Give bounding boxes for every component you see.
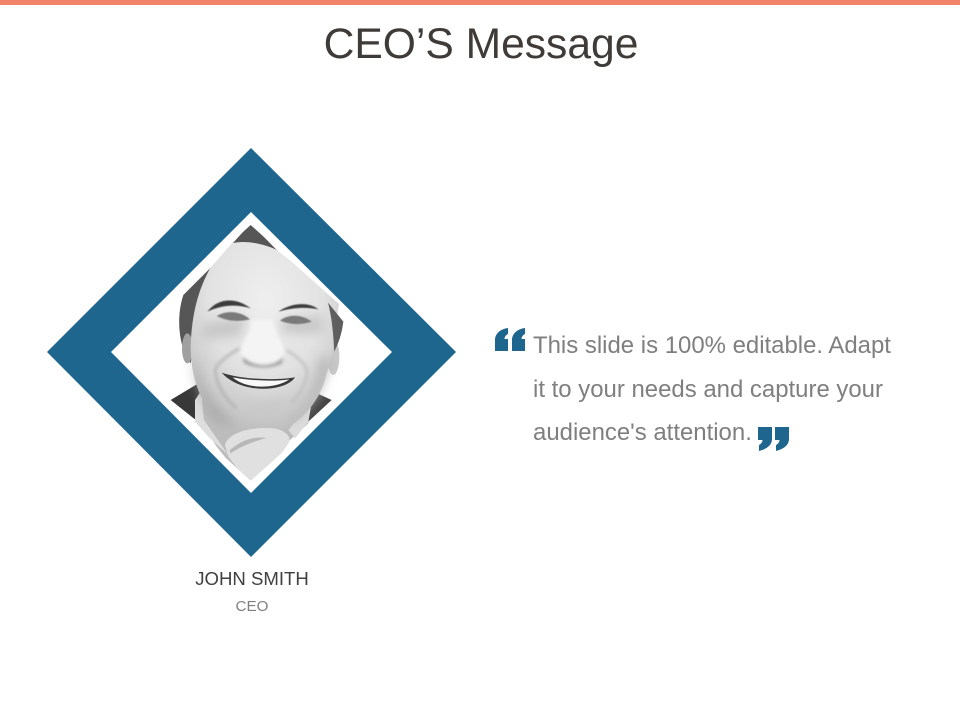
top hair [232,225,278,251]
hand [225,428,290,481]
outer blue diamond [47,148,456,557]
icon: opening quote [495,328,525,351]
smile [222,373,295,389]
shirt collars [195,392,228,455]
face shading [193,315,330,427]
jacket [170,384,200,420]
quote text [533,332,891,446]
quote text: it to your needs and capture your [533,376,883,402]
eyebrows [207,300,251,312]
neck [202,393,310,480]
eyes [217,312,250,321]
person role: CEO [236,598,268,615]
inner white diamond [111,212,392,493]
ears [182,333,193,363]
right hair [328,303,343,352]
person name: JOHN SMITH [195,568,309,589]
top accent bar [0,0,960,5]
title: CEO’S Message [324,20,638,68]
face [191,242,340,435]
photo of CEO [171,223,343,481]
nose [241,320,284,367]
quote text: audience's attention. [533,419,752,446]
quote text: This slide is 100% editable. Adapt [533,332,891,359]
icon: closing quote [758,427,789,451]
portrait diamond frame with photo [47,148,456,557]
smile lines [215,348,239,408]
left hair [179,267,212,364]
